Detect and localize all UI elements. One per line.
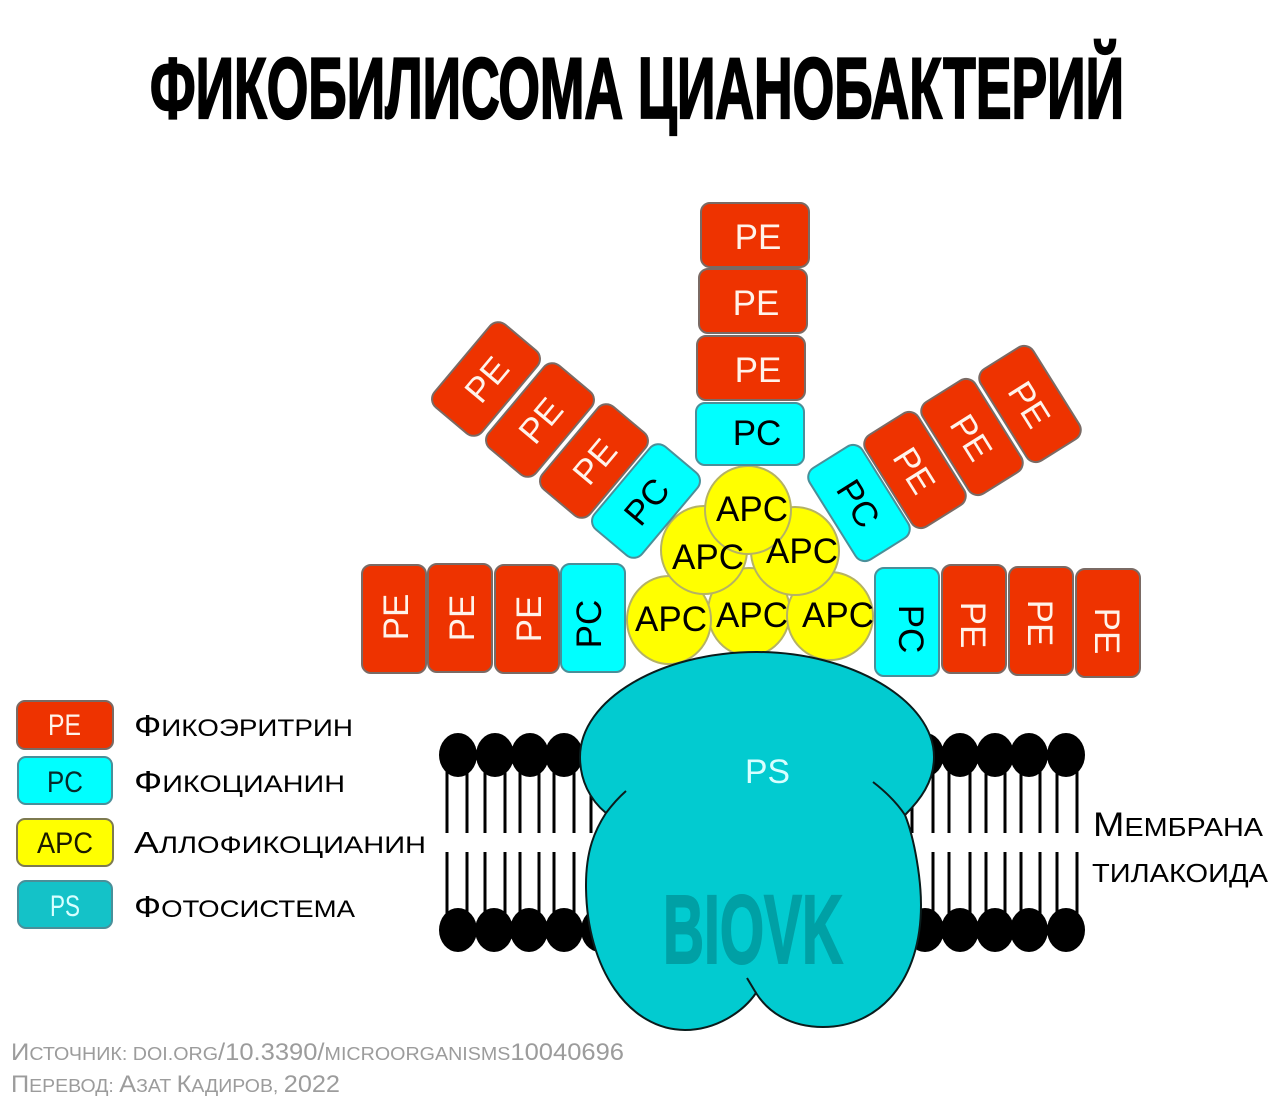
source credits [11,1039,624,1098]
PE block: PE [510,596,549,642]
PE block [362,565,426,673]
PE block [917,375,1027,499]
upper left rod [428,318,704,562]
PE block: PE [953,602,992,648]
APC labels [635,490,874,639]
legend: PE: ФИКОЭРИТРИН [134,708,353,743]
PE block: PE [1020,600,1059,646]
APC circle middle right [751,507,839,595]
APC labels: APC [716,596,788,635]
photosystem body [580,652,934,1030]
PE block [701,203,809,267]
PC block: PC [617,471,678,533]
PC block [588,440,704,562]
APC labels: APC [716,490,788,529]
upper right rod [804,342,1085,565]
PE block: PE [377,594,416,640]
PE block: PE [565,432,625,492]
PE block [975,342,1085,466]
PC block: PC [570,600,609,648]
PE block: PE [1087,608,1126,654]
legend: PC: ФИКОЦИАНИН [134,764,345,799]
PE block [1076,569,1140,677]
APC circle bottom left [627,576,711,664]
PS label: PS [745,753,790,791]
PE block: PE [457,350,517,410]
APC circle bottom middle [708,568,790,656]
PE block: PE [942,408,1000,468]
PE block [428,564,492,672]
legend: PS: PS [50,890,80,923]
legend: PS [18,881,355,928]
PE block [495,565,559,673]
APC labels: APC [766,532,838,571]
legend: APC: APC [37,827,93,860]
legend: PC: PC [47,766,83,799]
PC block [875,568,939,676]
PC block: PC [828,473,887,535]
PE block [536,400,652,522]
PC block: PC [891,605,930,653]
PE block: PE [735,218,781,257]
APC circle top [705,466,791,554]
legend: PE [17,701,353,749]
APC labels: APC [802,596,874,635]
PC block [561,564,625,672]
PC block [696,403,804,465]
PC block [804,441,914,565]
PC block: PC [733,414,781,453]
right rod [875,565,1140,677]
legend [17,701,426,928]
legend: PS: ФОТОСИСТЕМА [134,889,355,924]
membrane label [1092,806,1269,888]
PE block [428,318,544,440]
PE block [1009,567,1073,675]
left rod [362,564,625,673]
PE block: PE [511,391,571,451]
PE block [699,269,807,333]
PE block: PE [733,284,779,323]
APC labels: APC [672,538,744,577]
legend: APC: АЛЛОФИКОЦИАНИН [134,825,426,860]
source credits: ПЕРЕВОД: АЗАТ КАДИРОВ, 2022 [11,1071,340,1098]
APC labels: APC [635,600,707,639]
membrane label: ТИЛАКОИДА [1092,858,1269,888]
source credits: ИСТОЧНИК: DOI.ORG /10.3390/ MICROORGANISMS 10040696 [11,1039,624,1066]
membrane label: МЕМБРАНА [1093,806,1264,844]
top rod [696,203,809,465]
watermark: BIOVK [663,875,843,984]
membrane: thylakoid lipid bilayer [439,733,1085,952]
PE block: PE [885,441,943,501]
legend: PE: PE [48,709,81,742]
PE block [942,565,1006,673]
APC circle bottom right [787,572,873,660]
PE block: PE [443,595,482,641]
PE block [482,359,598,481]
PE block: PE [735,351,781,390]
PE block [860,408,970,532]
APC core: allophycocyanin circles [627,466,874,664]
PE block [697,336,805,400]
APC circle middle left [661,506,747,594]
legend: APC [17,819,426,866]
PE block: PE [1000,375,1058,435]
legend: PC [18,757,345,804]
